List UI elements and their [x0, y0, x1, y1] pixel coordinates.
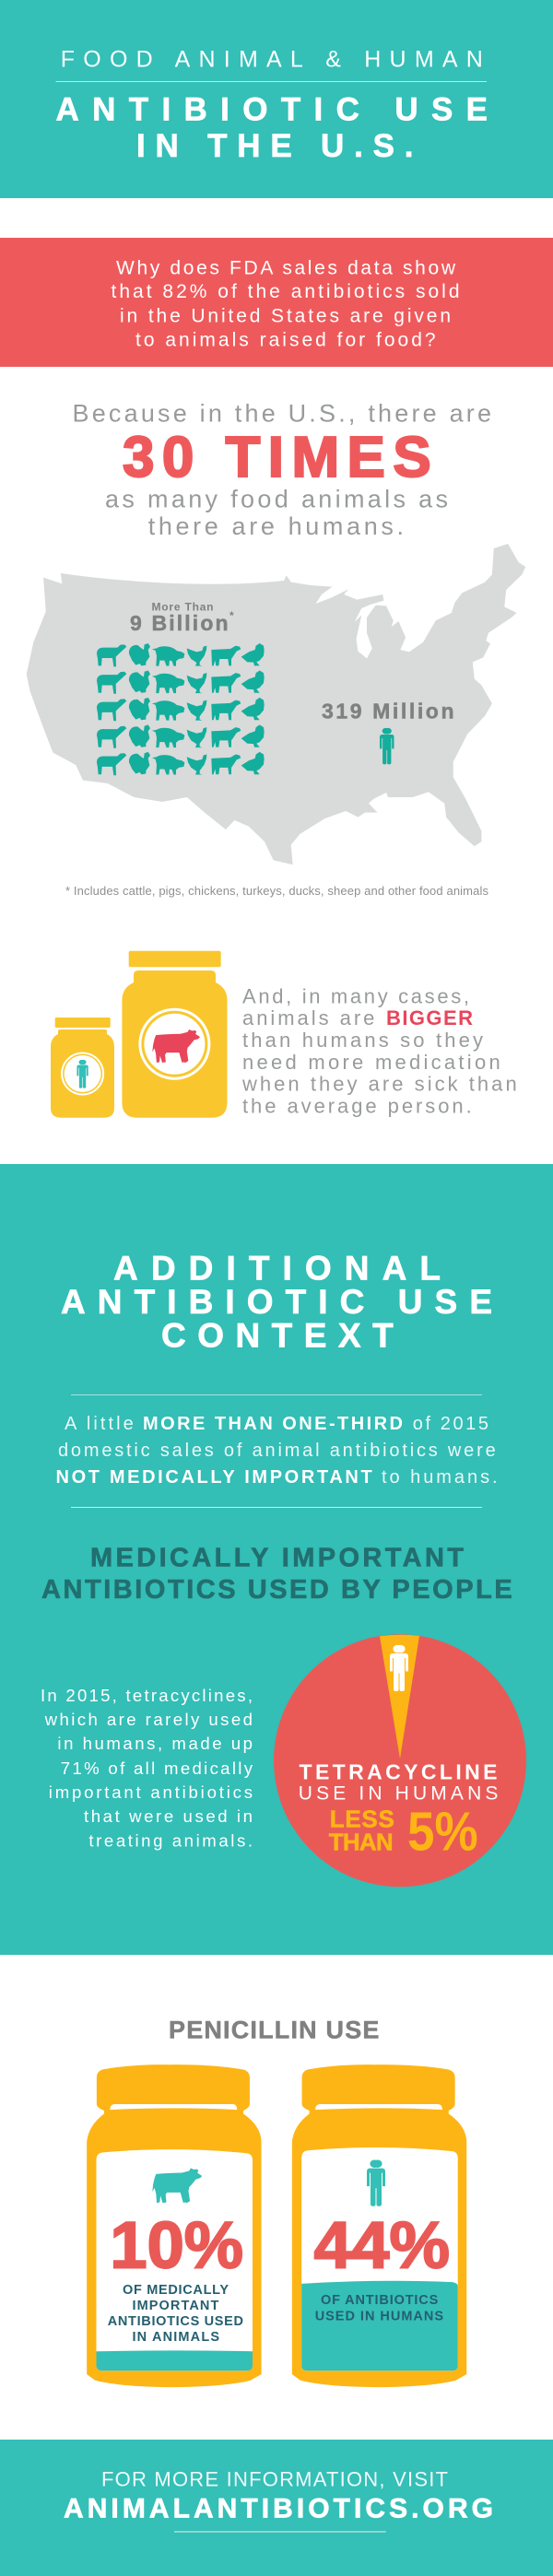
tetracycline text: 71% of all medically: [61, 1759, 253, 1778]
subtitle: FOOD ANIMAL & HUMAN: [61, 46, 483, 72]
text: animals are bigger: And, in many cases,: [242, 984, 469, 1007]
label: more than 9 billion: [130, 600, 234, 635]
tetracycline text: that were used in: [84, 1806, 253, 1826]
section heading: [61, 1249, 492, 1355]
label: more than 9 billion: More Than: [151, 600, 214, 613]
30 times statement: as many food animals as: [105, 485, 448, 512]
pie chart: [274, 1634, 526, 1887]
caption: IN ANIMALS: [133, 2330, 219, 2345]
bottle: humans: [292, 2064, 466, 2387]
icon: small bottle with person: [51, 1017, 114, 1118]
intro paragraph: [55, 1414, 498, 1488]
caption: ANTIBIOTICS USED: [108, 2314, 243, 2329]
question text: [111, 257, 459, 351]
caption: OF ANTIBIOTICS: [321, 2293, 439, 2308]
intro paragraph: MORE THAN ONE-THIRD: [143, 1414, 403, 1434]
main title: ANTIBIOTIC USE: [55, 92, 488, 127]
icon: person: [390, 1645, 408, 1691]
label: more than 9 billion: 9 Billion: [130, 611, 229, 635]
main title: IN THE U.S.: [136, 128, 413, 164]
section heading: ANTIBIOTIC USE: [61, 1283, 492, 1321]
pie slice: [380, 1635, 419, 1759]
question text: to animals raised for food?: [135, 330, 436, 351]
footer text: ANIMALANTIBIOTICS.ORG: [64, 2494, 493, 2524]
icon: person: [367, 2159, 385, 2206]
text: animals are bigger: BIGGER: [386, 1006, 473, 1029]
pie label: LESS: [330, 1806, 394, 1833]
animal grid: [97, 643, 265, 775]
main title: [55, 92, 488, 164]
30 times statement: Because in the U.S., there are: [72, 400, 491, 428]
text: animals are bigger: the average person.: [242, 1094, 472, 1117]
tetracycline text: important antibiotics: [49, 1782, 253, 1802]
tetracycline text: which are rarely used: [44, 1710, 253, 1729]
text: animals are bigger: animals are: [242, 1006, 374, 1029]
label: 319 million: 319 Million: [322, 699, 453, 723]
intro paragraph: of 2015: [413, 1414, 488, 1434]
intro paragraph: domestic sales of animal antibiotics were: [58, 1441, 496, 1461]
US map: [27, 544, 525, 865]
30 times statement: there are humans.: [148, 512, 404, 540]
icon: cow: [152, 2168, 202, 2203]
sub heading: [41, 1543, 512, 1605]
tetracycline text: In 2015, tetracyclines,: [41, 1686, 253, 1705]
icon: large bottle with cow: [122, 951, 227, 1118]
big number: 30 TIMES: [123, 426, 431, 489]
intro paragraph: NOT MEDICALLY IMPORTANT: [55, 1467, 372, 1488]
footer text: FOR MORE INFORMATION, VISIT: [101, 2468, 448, 2491]
question text: Why does FDA sales data show: [116, 257, 456, 278]
caption: USED IN HUMANS: [315, 2310, 443, 2324]
pie label: THAN: [329, 1828, 394, 1855]
text: animals are bigger: need more medication: [242, 1051, 500, 1074]
tetracycline text: treating animals.: [88, 1830, 253, 1850]
question text: in the United States are given: [120, 306, 451, 326]
30 times statement: [72, 400, 491, 540]
footnote: * Includes cattle, pigs, chickens, turkeys, ducks, sheep and other food animals: [65, 884, 488, 898]
question text: that 82% of the antibiotics sold: [111, 281, 459, 302]
section heading: CONTEXT: [161, 1317, 394, 1355]
question band: [0, 238, 553, 367]
tetracycline text: in humans, made up: [57, 1734, 253, 1753]
tetracycline text: [41, 1686, 253, 1850]
percentage: 44%: [314, 2209, 450, 2282]
bottle: animals: [87, 2064, 262, 2387]
pie label: USE IN HUMANS: [299, 1783, 498, 1805]
penicillin heading: PENICILLIN USE: [169, 2016, 379, 2043]
intro paragraph: A little: [65, 1414, 134, 1434]
sub heading: ANTIBIOTICS USED BY PEOPLE: [41, 1575, 512, 1605]
pie label: TETRACYCLINE: [299, 1760, 498, 1784]
icon: person: [380, 728, 394, 764]
sub heading: MEDICALLY IMPORTANT: [90, 1543, 464, 1572]
intro paragraph: to humans.: [382, 1467, 498, 1488]
percentage: 10%: [110, 2209, 243, 2282]
text: animals are bigger: than humans so they: [242, 1029, 483, 1052]
caption: IMPORTANT: [133, 2299, 218, 2313]
pie label: 5%: [407, 1801, 478, 1862]
text: animals are bigger: when they are sick than: [241, 1072, 517, 1095]
panel: additional context: [0, 1164, 553, 2576]
label: more than 9 billion: *: [229, 609, 234, 622]
footer text: [64, 2468, 493, 2524]
header band: [0, 0, 553, 198]
text: animals are bigger: [241, 984, 517, 1117]
section heading: ADDITIONAL: [113, 1249, 441, 1287]
pie label: [299, 1760, 498, 1862]
footer: [0, 2440, 553, 2576]
caption: [315, 2293, 443, 2324]
caption: OF MEDICALLY: [123, 2283, 229, 2298]
caption: [108, 2283, 243, 2345]
